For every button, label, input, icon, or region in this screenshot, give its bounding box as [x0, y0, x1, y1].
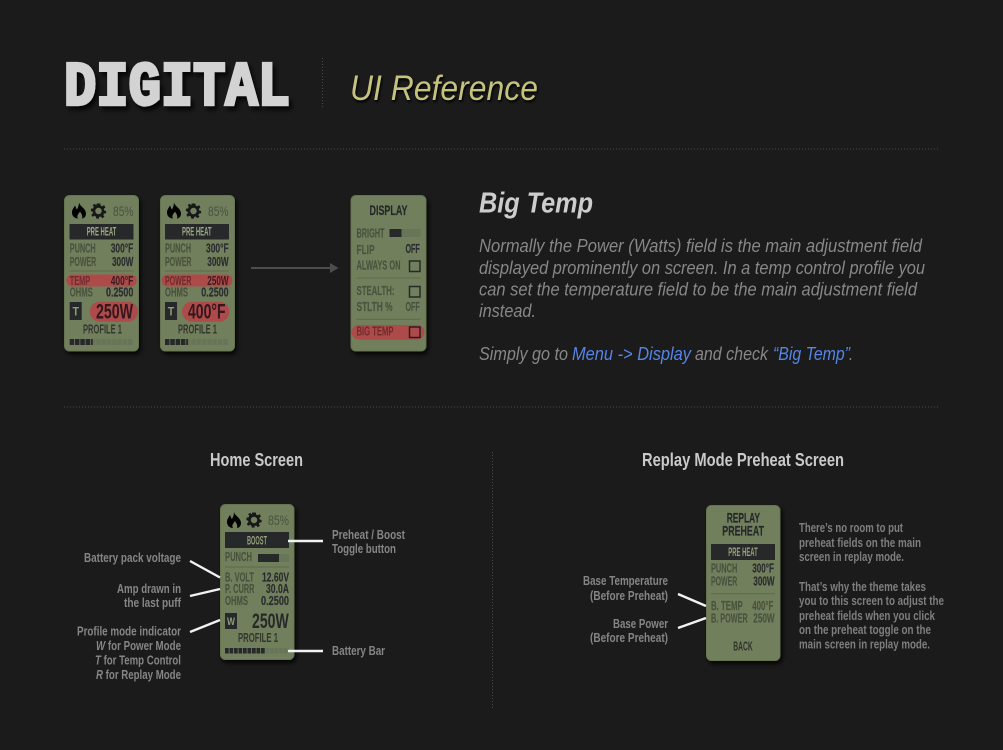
button: pre heat — [711, 544, 775, 560]
text block: replay explanation: screen in replay mode. — [799, 550, 904, 564]
profile name: PROFILE 1 — [238, 631, 278, 645]
button: pre heat — [70, 224, 134, 240]
callout: profile mode indicator: W for Power Mode — [96, 638, 181, 653]
button: pre heat: PRE HEAT — [728, 547, 758, 559]
field: power: 300W — [753, 575, 775, 589]
arrow — [251, 263, 338, 273]
field: ohms: OHMS — [225, 594, 248, 608]
highlighted field: temp: TEMP — [70, 274, 90, 288]
text block: replay explanation: preheat fields when you click — [799, 609, 935, 623]
field: punch: PUNCH — [165, 242, 191, 256]
field: punch — [70, 242, 134, 256]
callout: base temperature: (Before Preheat) — [590, 588, 668, 603]
screen: temp main field — [160, 196, 234, 351]
field: ohms — [70, 286, 133, 300]
callout: battery pack voltage: Battery pack voltage — [84, 550, 181, 565]
text block: replay explanation: That’s why the theme takes — [799, 580, 926, 594]
screen: power main field — [64, 196, 138, 351]
field: power: POWER — [70, 255, 96, 269]
highlighted field: temp — [66, 274, 137, 288]
main value: 400F: 400°F — [188, 300, 226, 323]
field: power: POWER — [165, 255, 192, 269]
callout: amp drawn: Amp drawn in — [117, 581, 181, 596]
field: puff current: 30.0A — [266, 582, 289, 596]
icon: gear — [246, 512, 262, 528]
callout: amp drawn: the last puff — [124, 595, 182, 610]
text block: replay explanation — [799, 521, 944, 652]
battery percent: 85% — [208, 203, 228, 219]
panel: big temp description — [479, 188, 925, 364]
button: pre heat: PRE HEAT — [87, 226, 116, 238]
field: ohms: OHMS — [165, 286, 188, 300]
text block: replay explanation: main screen in replay mode. — [799, 638, 930, 652]
field: ohms: OHMS — [70, 286, 93, 300]
text block: replay explanation: you to this screen to adjust the — [799, 594, 944, 608]
instruction: and check — [695, 344, 769, 364]
field: punch: PUNCH — [711, 562, 737, 576]
highlighted field: power: POWER — [165, 274, 192, 288]
callout: preheat boost toggle — [288, 527, 406, 556]
field: base power: B. POWER — [711, 612, 748, 626]
mode indicator W: W — [227, 616, 235, 628]
callout: preheat boost toggle: Preheat / Boost — [332, 527, 406, 542]
field: punch: PUNCH — [225, 550, 252, 564]
instruction: “Big Temp” — [773, 344, 851, 364]
text block: replay explanation: preheat fields on the main — [799, 536, 921, 550]
screen: home — [220, 504, 294, 660]
field: battery voltage: 12.60V — [262, 570, 289, 584]
callout: base power: (Before Preheat) — [590, 630, 668, 645]
callout: base temperature: Base Temperature — [583, 573, 668, 588]
heading: Big Temp: Big Temp — [479, 188, 593, 220]
text block: replay explanation: There’s no room to put — [799, 521, 904, 535]
icon: flame — [167, 202, 181, 218]
instruction — [479, 344, 853, 364]
callout: profile mode indicator: T for Temp Control — [95, 652, 181, 668]
mode indicator T: T — [168, 304, 175, 318]
button: pre heat — [165, 224, 229, 240]
screen: display menu — [351, 196, 426, 351]
main value: 400F — [182, 300, 230, 323]
field: power: POWER — [711, 575, 737, 589]
field: flip — [356, 242, 420, 257]
field: always on: ALWAYS ON — [356, 258, 400, 272]
field: stealth percent: STLTH % — [356, 300, 392, 314]
field: puff current: P. CURR — [225, 582, 254, 596]
field: battery voltage: B. VOLT — [225, 570, 254, 584]
battery bar — [165, 339, 229, 345]
button: boost — [225, 532, 289, 548]
field: punch — [165, 242, 229, 256]
field: punch: 300°F — [206, 242, 229, 256]
callout: base temperature — [583, 573, 706, 606]
field: bright: BRIGHT — [356, 227, 385, 241]
button: boost: BOOST — [247, 536, 267, 548]
battery bar — [70, 339, 133, 345]
field: stealth: STEALTH: — [356, 284, 394, 298]
highlighted field: power — [162, 274, 232, 288]
button: pre heat: PRE HEAT — [182, 226, 212, 238]
field: power: 300W — [207, 255, 229, 269]
paragraph: can set the temperature field to be the main adjustment field — [479, 280, 918, 300]
battery percent: 85% — [268, 512, 289, 528]
highlighted field: big temp: BIG TEMP — [356, 324, 394, 338]
paragraph — [479, 236, 925, 321]
back button: BACK — [733, 639, 753, 654]
field: base temp: 400°F — [752, 599, 774, 613]
screen heading: REPLAY — [727, 509, 760, 525]
callout: battery pack voltage — [84, 550, 220, 578]
profile name: PROFILE 1 — [83, 323, 122, 337]
screen: replay preheat — [706, 506, 780, 660]
subtitle: UI Reference: UI Reference — [350, 69, 538, 108]
field: ohms: 0.2500 — [261, 594, 289, 608]
profile name: PROFILE 1 — [178, 323, 217, 337]
screen heading: PREHEAT — [722, 523, 764, 539]
mode indicator T: T — [72, 304, 80, 318]
heading: Home Screen: Home Screen — [210, 450, 303, 470]
field: punch: 300°F — [752, 562, 774, 576]
instruction: Simply go to — [479, 344, 568, 364]
icon: gear — [186, 204, 201, 219]
paragraph: Normally the Power (Watts) field is the main adjustment field — [479, 236, 923, 256]
menu heading: DISPLAY — [370, 202, 408, 218]
icon: flame — [72, 202, 86, 218]
callout: amp drawn — [117, 581, 220, 610]
field: punch — [225, 550, 289, 564]
icon: gear — [91, 204, 106, 219]
field: ohms: 0.2500 — [201, 286, 229, 300]
field: ohms — [165, 286, 229, 300]
instruction: . — [849, 344, 853, 364]
field: base power: 250W — [753, 612, 775, 626]
heading: Replay Mode Preheat Screen: Replay Mode Preheat Screen — [642, 450, 844, 470]
main value: 250W: 250W — [252, 610, 289, 633]
callout: preheat boost toggle: Toggle button — [332, 541, 396, 556]
callout: profile mode indicator: R for Replay Mode — [96, 667, 181, 682]
main value: 250W — [90, 300, 138, 323]
highlighted field: power: 250W — [207, 274, 229, 288]
field: punch: PUNCH — [70, 242, 96, 256]
callout: base power — [590, 616, 706, 645]
field: base temp: B. TEMP — [711, 599, 743, 613]
field: power: 300W — [112, 255, 133, 269]
mode indicator W — [225, 613, 237, 629]
field: punch: 300°F — [111, 242, 134, 256]
field: flip: FLIP — [356, 243, 374, 257]
text block: replay explanation: on the preheat toggle on the — [799, 623, 931, 637]
paragraph: displayed prominently on screen. In a temp control profile you — [479, 258, 925, 278]
main value: 250W: 250W — [96, 300, 133, 323]
instruction: Menu -> Display — [572, 344, 692, 364]
battery bar — [225, 648, 289, 653]
mode indicator T — [70, 302, 82, 320]
field: ohms — [225, 594, 289, 608]
callout: profile mode indicator — [77, 620, 220, 682]
mode indicator T — [165, 302, 177, 320]
screen heading — [722, 509, 764, 539]
callout: battery bar — [288, 643, 385, 658]
field: stealth percent: OFF — [406, 300, 420, 314]
highlighted field: temp: 400°F — [111, 274, 134, 288]
callout: battery bar: Battery Bar — [332, 643, 385, 658]
icon: flame — [227, 512, 241, 528]
callout: base power: Base Power — [613, 616, 668, 631]
battery percent: 85% — [113, 203, 134, 219]
field: flip: OFF — [406, 242, 420, 256]
paragraph: instead. — [479, 301, 536, 321]
title: DIGITAL: DIGITAL — [64, 52, 290, 124]
field: ohms: 0.2500 — [106, 286, 133, 300]
callout: profile mode indicator: Profile mode indicator — [77, 624, 181, 638]
